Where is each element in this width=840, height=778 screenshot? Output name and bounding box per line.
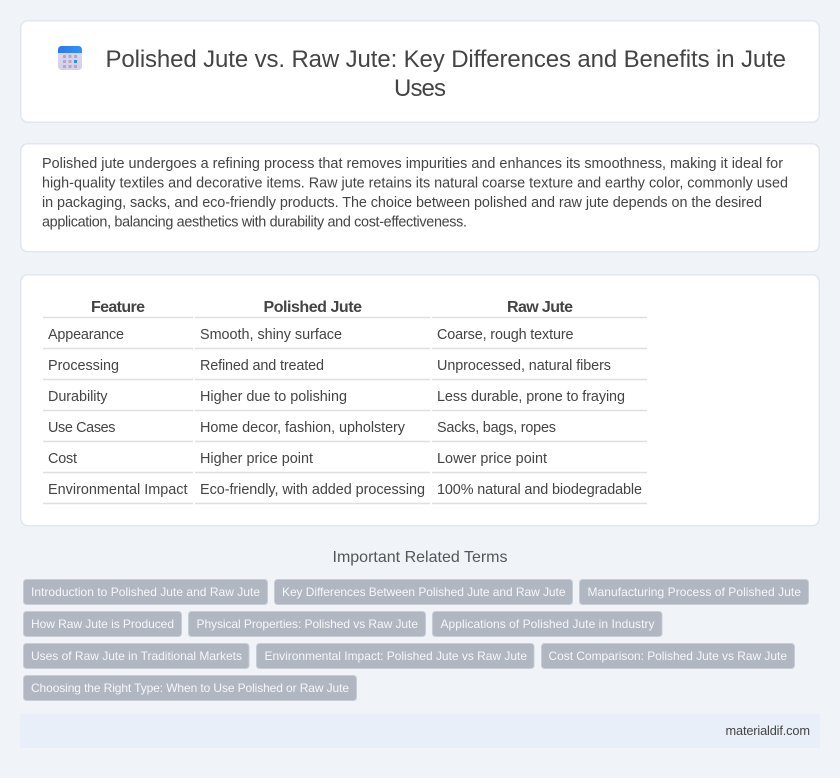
title: Polished Jute vs. Raw Jute: Key Differences and Benefits in Jute [106,46,786,73]
tag [24,676,356,700]
tag [274,580,572,604]
tag: Manufacturing Process of Polished Jute [588,585,801,599]
row: cost [43,451,647,472]
tag: Choosing the Right Type: When to Use Polished or Raw Jute [31,681,349,695]
row: environmental impact: Environmental Impact [48,482,188,498]
panel: comparison table [21,275,819,526]
row: appearance: Smooth, shiny surface [200,327,342,343]
tag [24,580,268,604]
row: use cases: Use Cases [48,420,116,436]
row: durability: Higher due to polishing [200,389,347,405]
row: processing: Refined and treated [200,358,324,374]
icon: calendar [58,46,82,70]
intro paragraph: high-quality textiles and decorative items. Raw jute retains its natural coarse texture and earthy color, commonly used [42,176,788,192]
row: processing: Processing [48,358,119,374]
tag: Cost Comparison: Polished Jute vs Raw Jute [548,649,787,663]
intro paragraph: application, balancing aesthetics with durability and cost-effectiveness. [42,214,467,230]
tag: Introduction to Polished Jute and Raw Jute [31,585,260,599]
tag: Key Differences Between Polished Jute and Raw Jute [282,585,566,599]
tag: How Raw Jute is Produced [31,617,174,631]
row: appearance: Coarse, rough texture [437,327,574,343]
table header row: Feature [91,299,145,316]
row: use cases [43,420,647,442]
row: cost: Cost [48,451,77,467]
tag [188,612,426,636]
tag [542,644,794,668]
row: use cases: Home decor, fashion, upholstery [200,420,406,436]
title: Uses [394,75,446,102]
table header row: Raw Jute [507,299,573,316]
tag [432,612,662,636]
panel: introduction [21,144,819,252]
table header row: Polished Jute [264,299,362,316]
row: environmental impact: 100% natural and biodegradable [437,482,642,498]
row: environmental impact [43,482,647,504]
row: appearance: Appearance [48,327,124,343]
row: processing: Unprocessed, natural fibers [437,358,611,374]
row: cost: Lower price point [437,451,547,467]
intro paragraph: Polished jute undergoes a refining process that removes impurities and enhances its smoothness, making it ideal for [42,156,783,172]
tag [24,612,182,636]
tag [256,644,534,668]
tag [24,644,249,668]
panel: title header [21,21,819,122]
related terms tags [24,580,808,700]
row: processing [43,358,647,380]
tag: Applications of Polished Jute in Industry [440,617,654,631]
footer [20,714,820,748]
intro paragraph: in packaging, sacks, and eco-friendly products. The choice between polished and raw jute depends on the desired [42,195,762,211]
tag: Uses of Raw Jute in Traditional Markets [31,649,242,663]
footer source text: materialdif.com [726,723,810,738]
tag: Environmental Impact: Polished Jute vs Raw Jute [264,649,527,663]
row: durability: Less durable, prone to fraying [437,389,625,405]
row: environmental impact: Eco-friendly, with added processing [200,482,425,498]
row: durability: Durability [48,389,108,405]
tag: Physical Properties: Polished vs Raw Jute [196,617,418,631]
row: cost: Higher price point [200,451,313,467]
row: appearance [43,327,647,348]
row: durability [43,389,647,410]
table header row [43,299,647,318]
tag [580,580,808,604]
heading: important related terms: Important Related Terms [332,549,508,566]
row: use cases: Sacks, bags, ropes [437,420,556,436]
